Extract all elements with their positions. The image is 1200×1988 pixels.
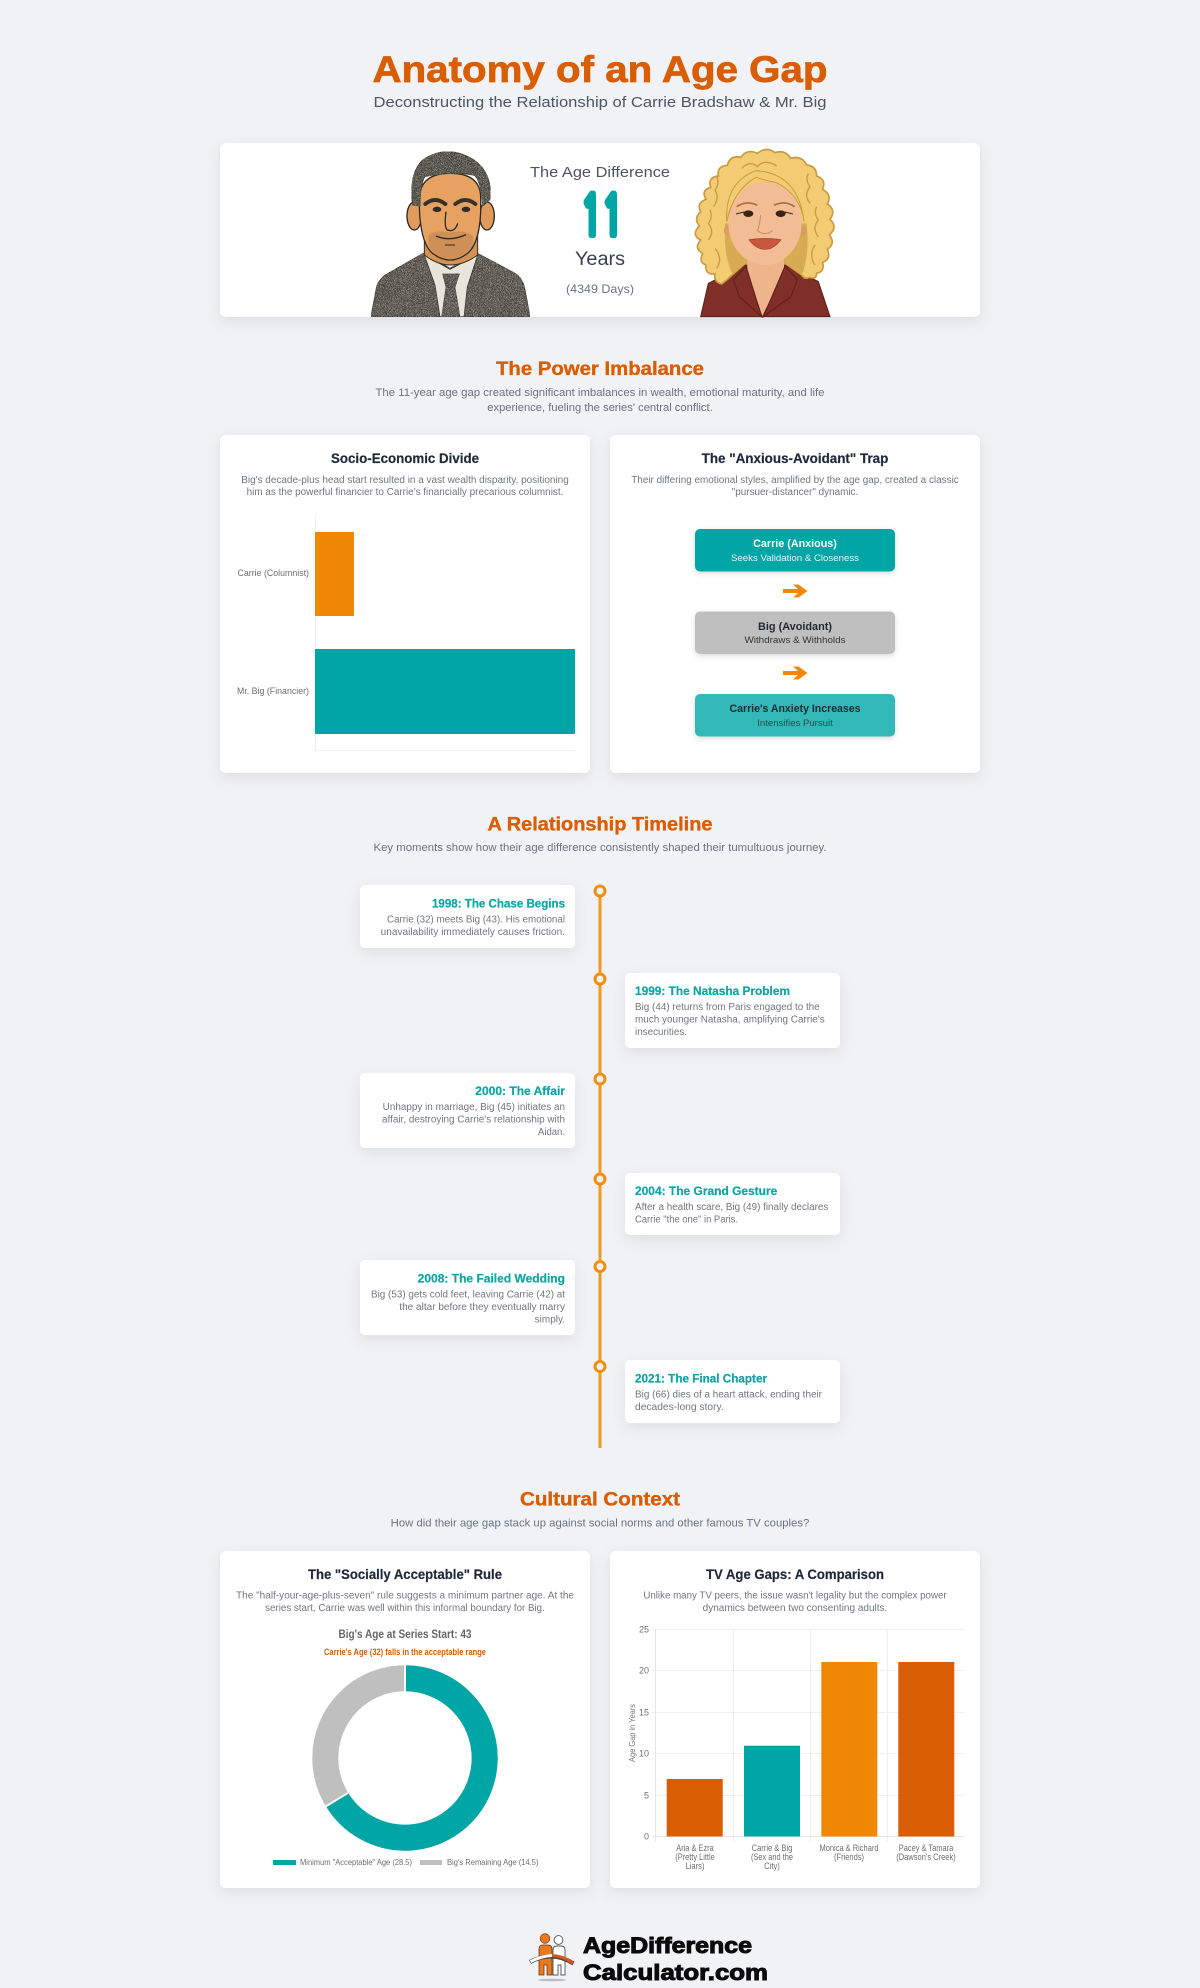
timeline card: 1999: Big (44) returns from Paris engaged to the — [635, 1002, 820, 1013]
timeline card: 2004: After a health scare, Big (49) finally declares — [635, 1202, 828, 1213]
x label: Monica & Richard: (Friends) — [834, 1852, 864, 1862]
bar chart: wealth comparison — [237, 515, 575, 750]
timeline card: 2004 — [625, 1173, 840, 1235]
legend text: remaining: Big's Remaining Age (14.5) — [447, 1857, 539, 1867]
timeline marker: 2000 — [595, 1074, 605, 1084]
flow box: Big avoidant — [695, 612, 895, 654]
timeline card: 2008: Big (53) gets cold feet, leaving Carrie (42) at — [371, 1290, 565, 1300]
x label: Carrie & Big — [751, 1843, 793, 1871]
logo text: Calculator.com: Calculator.com — [583, 1960, 768, 1985]
x label: Aria & Ezra: (Pretty Little — [675, 1852, 715, 1862]
panel: TV age gaps comparison — [610, 1551, 980, 1888]
section heading: cultural context: Cultural Context — [520, 1490, 681, 1510]
section description: power imbalance: experience, fueling the series' central conflict. — [487, 402, 713, 414]
y axis title: Age Gap in Years — [627, 1704, 637, 1762]
logo text: AgeDifference: AgeDifference — [583, 1933, 752, 1958]
timeline card: 2000: affair, destroying Carrie's relationship with — [382, 1114, 565, 1126]
timeline card: 2021: 2021: The Final Chapter — [635, 1372, 767, 1386]
description: TV age gaps — [643, 1590, 947, 1614]
x label: Aria & Ezra: Aria & Ezra — [676, 1843, 714, 1853]
description: socially acceptable — [236, 1590, 575, 1614]
label: days: (4349 Days) — [566, 282, 634, 296]
timeline marker: 2004 — [595, 1174, 605, 1184]
timeline card: 1998: Carrie (32) meets Big (43). His emotional — [387, 914, 565, 926]
description: socially acceptable: The "half-your-age-plus-seven" rule suggests a minimum partner age. At the — [236, 1590, 575, 1602]
timeline card: 2008: simply. — [535, 1314, 565, 1326]
timeline card: 2000: Aidan. — [538, 1127, 565, 1138]
x label: Monica & Richard — [820, 1843, 878, 1862]
donut chart — [325, 1665, 485, 1838]
timeline card: 2004: Carrie "the one" in Paris. — [635, 1214, 738, 1226]
y axis tick labels — [639, 1624, 649, 1842]
timeline card: 1998: unavailability immediately causes friction. — [381, 927, 565, 938]
icon: Mr. Big portrait — [371, 152, 530, 317]
timeline card: 1999 — [625, 973, 840, 1048]
footer logo — [530, 1933, 768, 1985]
section description: timeline: Key moments show how their age difference consistently shaped their tumultuous journey. — [374, 842, 826, 854]
label: years: Years — [575, 249, 625, 270]
timeline card: 1999: insecurities. — [635, 1027, 687, 1038]
section description: cultural context: How did their age gap stack up against social norms and other famous TV couples? — [391, 1518, 809, 1530]
timeline card: 2021: decades-long story. — [635, 1402, 724, 1413]
bar: Aria & Ezra — [667, 1779, 723, 1836]
bar: Monica & Richard — [821, 1662, 877, 1836]
flow box: Big avoidant: Withdraws & Withholds — [744, 635, 846, 646]
arrow: anxious to avoidant — [783, 584, 808, 598]
timeline card: 2008: the altar before they eventually marry — [399, 1302, 565, 1313]
description: anxious-avoidant: Their differing emotional styles, amplified by the age gap, created a classic — [631, 475, 959, 486]
chart title: Big's age: Big's Age at Series Start: 43 — [338, 1629, 472, 1641]
y axis tick labels: 10 — [639, 1748, 649, 1758]
number: 11 years: 11 — [581, 191, 623, 244]
flow box: Carrie anxious: Carrie (Anxious) — [753, 538, 837, 550]
section description: power imbalance: The 11-year age gap created significant imbalances in wealth, emotional maturity, and life — [376, 387, 824, 399]
timeline card: 1998: 1998: The Chase Begins — [432, 896, 565, 910]
legend swatch: minimum — [273, 1860, 296, 1865]
label: the age difference: The Age Difference — [530, 164, 670, 181]
x label: Pacey & Tamara: Pacey & Tamara — [899, 1843, 953, 1853]
timeline card: 1998 — [360, 885, 575, 948]
panel: age difference hero — [220, 143, 980, 317]
axis label: Mr. Big: Mr. Big (Financier) — [237, 686, 309, 696]
section heading: the power imbalance: The Power Imbalance — [496, 359, 704, 380]
timeline card: 1999: 1999: The Natasha Problem — [635, 984, 790, 998]
x label: Aria & Ezra: Liars) — [686, 1861, 704, 1871]
section heading: timeline: A Relationship Timeline — [488, 814, 713, 836]
arrow: avoidant to anxiety — [783, 666, 808, 680]
bar: Pacey & Tamara — [898, 1662, 954, 1836]
x label: Pacey & Tamara: (Dawson's Creek) — [896, 1852, 956, 1862]
x label: Monica & Richard: Monica & Richard — [820, 1843, 878, 1853]
chart subtitle: Carrie's age: Carrie's Age (32) falls in the acceptable range — [324, 1647, 486, 1657]
timeline marker: 2008 — [595, 1262, 605, 1272]
y axis tick labels: 15 — [639, 1708, 649, 1718]
heading: socio-economic divide: Socio-Economic Divide — [331, 451, 479, 466]
icon: logo figures — [530, 1934, 574, 1981]
subtitle: Deconstructing the Relationship of Carrie Bradshaw & Mr. Big — [374, 94, 826, 111]
timeline card: 2008 — [360, 1260, 575, 1335]
timeline card: 2000 — [360, 1073, 575, 1148]
panel: socially acceptable rule — [220, 1551, 590, 1888]
description: anxious-avoidant — [631, 475, 959, 498]
section description: power imbalance — [376, 387, 824, 414]
x label: Pacey & Tamara — [896, 1843, 956, 1862]
heading: socially acceptable rule: The "Socially Acceptable" Rule — [308, 1567, 502, 1582]
axis label: Carrie: Carrie (Columnist) — [238, 568, 309, 578]
y axis tick labels: 20 — [639, 1666, 649, 1676]
description: socio-economic: Big's decade-plus head start resulted in a vast wealth disparity, positioning — [241, 475, 569, 486]
description: TV age gaps: Unlike many TV peers, the issue wasn't legality but the complex power — [643, 1590, 947, 1602]
donut segment: minimum acceptable age — [325, 1678, 485, 1838]
icon: Carrie portrait — [695, 149, 834, 317]
flow box: Big avoidant: Big (Avoidant) — [758, 621, 832, 633]
title: Anatomy of an Age Gap — [372, 49, 828, 90]
flow box: Carrie anxious: Seeks Validation & Closeness — [731, 553, 859, 564]
flow box: anxiety increases: Intensifies Pursuit — [757, 718, 833, 729]
legend swatch: remaining — [420, 1860, 442, 1865]
timeline marker: 2021 — [595, 1362, 605, 1372]
timeline marker: 1998 — [595, 886, 605, 896]
x label: Carrie & Big: City) — [764, 1861, 780, 1871]
timeline card: 1999: much younger Natasha, amplifying Carrie's — [635, 1014, 825, 1026]
timeline card: 2021 — [625, 1360, 840, 1423]
timeline card: 2021: Big (66) dies of a heart attack, ending their — [635, 1390, 823, 1400]
panel: anxious-avoidant trap — [610, 435, 980, 773]
description: socio-economic: him as the powerful financier to Carrie's financially precarious columnist. — [247, 487, 563, 498]
flow box: anxiety increases: Carrie's Anxiety Increases — [730, 703, 860, 715]
y axis tick labels: 0 — [644, 1832, 649, 1842]
timeline card: 2004: 2004: The Grand Gesture — [635, 1184, 778, 1198]
x label: Carrie & Big: (Sex and the — [751, 1852, 793, 1862]
timeline card: 2000: Unhappy in marriage, Big (45) initiates an — [383, 1102, 565, 1113]
bar chart: TV couples — [627, 1624, 965, 1871]
heading: TV age gaps: TV Age Gaps: A Comparison — [706, 1567, 884, 1582]
panel: socio-economic divide — [220, 435, 590, 773]
legend text: minimum: Minimum "Acceptable" Age (28.5) — [300, 1857, 412, 1867]
timeline marker: 1999 — [595, 974, 605, 984]
heading: anxious-avoidant trap: The "Anxious-Avoidant" Trap — [702, 451, 888, 466]
bar: Mr. Big — [315, 649, 575, 734]
bar: Carrie — [315, 532, 354, 616]
x label: Aria & Ezra — [675, 1843, 715, 1871]
timeline — [360, 885, 840, 1448]
x label: Carrie & Big: Carrie & Big — [752, 1843, 792, 1853]
timeline card: 2000: 2000: The Affair — [475, 1084, 565, 1098]
y axis tick labels: 25 — [639, 1624, 649, 1634]
timeline card: 2008: 2008: The Failed Wedding — [418, 1272, 565, 1286]
description: TV age gaps: dynamics between two consenting adults. — [703, 1603, 887, 1614]
flow box: anxiety increases — [695, 694, 895, 736]
description: anxious-avoidant: "pursuer-distancer" dynamic. — [732, 487, 858, 498]
legend — [273, 1857, 539, 1867]
timeline spine — [598, 888, 602, 1448]
y axis tick labels: 5 — [644, 1790, 649, 1800]
description: socio-economic — [241, 475, 569, 498]
bar: Carrie & Big — [744, 1746, 800, 1836]
description: socially acceptable: series start, Carrie was well within this informal boundary for Big. — [265, 1603, 545, 1614]
flow box: Carrie anxious — [695, 529, 895, 572]
donut segment: remaining age — [325, 1678, 485, 1838]
